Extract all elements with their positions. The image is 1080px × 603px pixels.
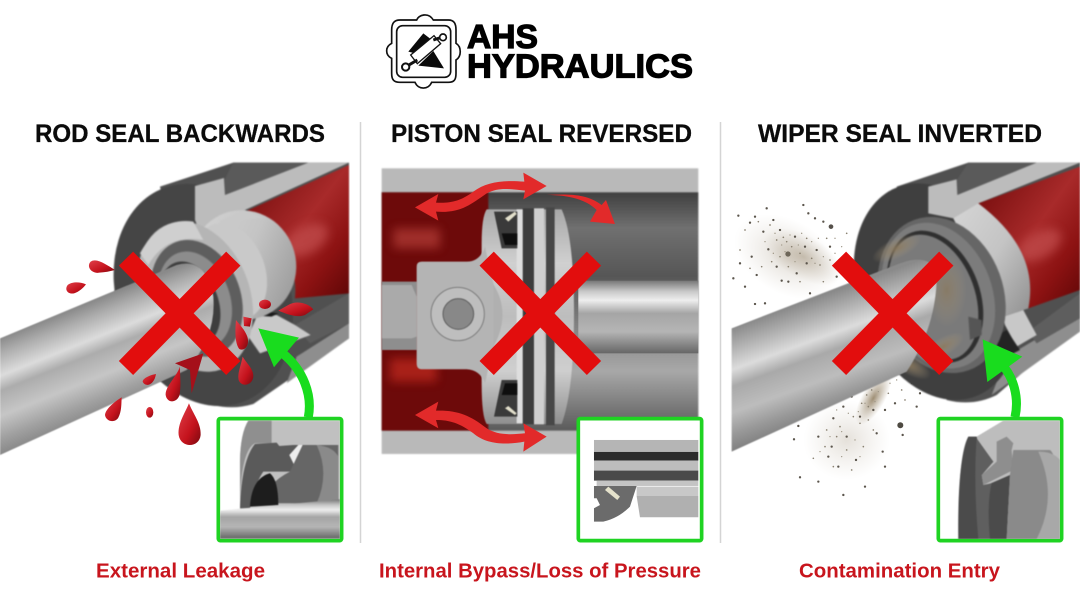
green arrow: [983, 339, 1022, 417]
red X: [487, 259, 594, 368]
piston rod: [0, 264, 214, 455]
icon: cylinder emblem: [387, 15, 460, 88]
caption: external leakage: External Leakage: [96, 560, 265, 582]
logo: AHS Hydraulics: [387, 15, 693, 88]
inset: wiper seal detail: [938, 419, 1062, 541]
dust particles: [719, 197, 920, 495]
company name: [467, 18, 693, 84]
caption: contamination entry: Contamination Entry: [799, 560, 1001, 582]
heading: wiper seal inverted: WIPER SEAL INVERTED: [758, 120, 1042, 148]
cylinder barrel: [382, 168, 698, 454]
company name: HYDRAULICS: [467, 48, 693, 84]
panel: wiper seal inverted: [719, 160, 1080, 541]
heading: piston seal reversed: PISTON SEAL REVERSED: [391, 120, 692, 148]
company name: AHS: [467, 18, 538, 55]
heading: rod seal backwards: ROD SEAL BACKWARDS: [35, 120, 325, 148]
connecting rod end: [382, 247, 493, 383]
piston rings and seals: [482, 207, 574, 425]
panel: piston seal reversed: [382, 168, 702, 541]
inset: rod seal detail: [218, 419, 342, 541]
red X: [839, 259, 946, 368]
red X: [126, 259, 233, 368]
oil drops: [66, 260, 313, 445]
piston rod: [732, 260, 937, 452]
dividers: [360, 122, 720, 543]
caption: internal bypass: Internal Bypass/Loss of Pressure: [379, 560, 701, 582]
green arrow: [258, 328, 309, 417]
cylinder housing cutaway: [112, 162, 350, 408]
cylinder housing cutaway: [825, 160, 1080, 423]
panel: rod seal backwards: [0, 158, 349, 541]
inset: piston seal detail: [578, 419, 702, 541]
red flow arrows: [415, 173, 615, 452]
piston rod: [578, 281, 698, 353]
